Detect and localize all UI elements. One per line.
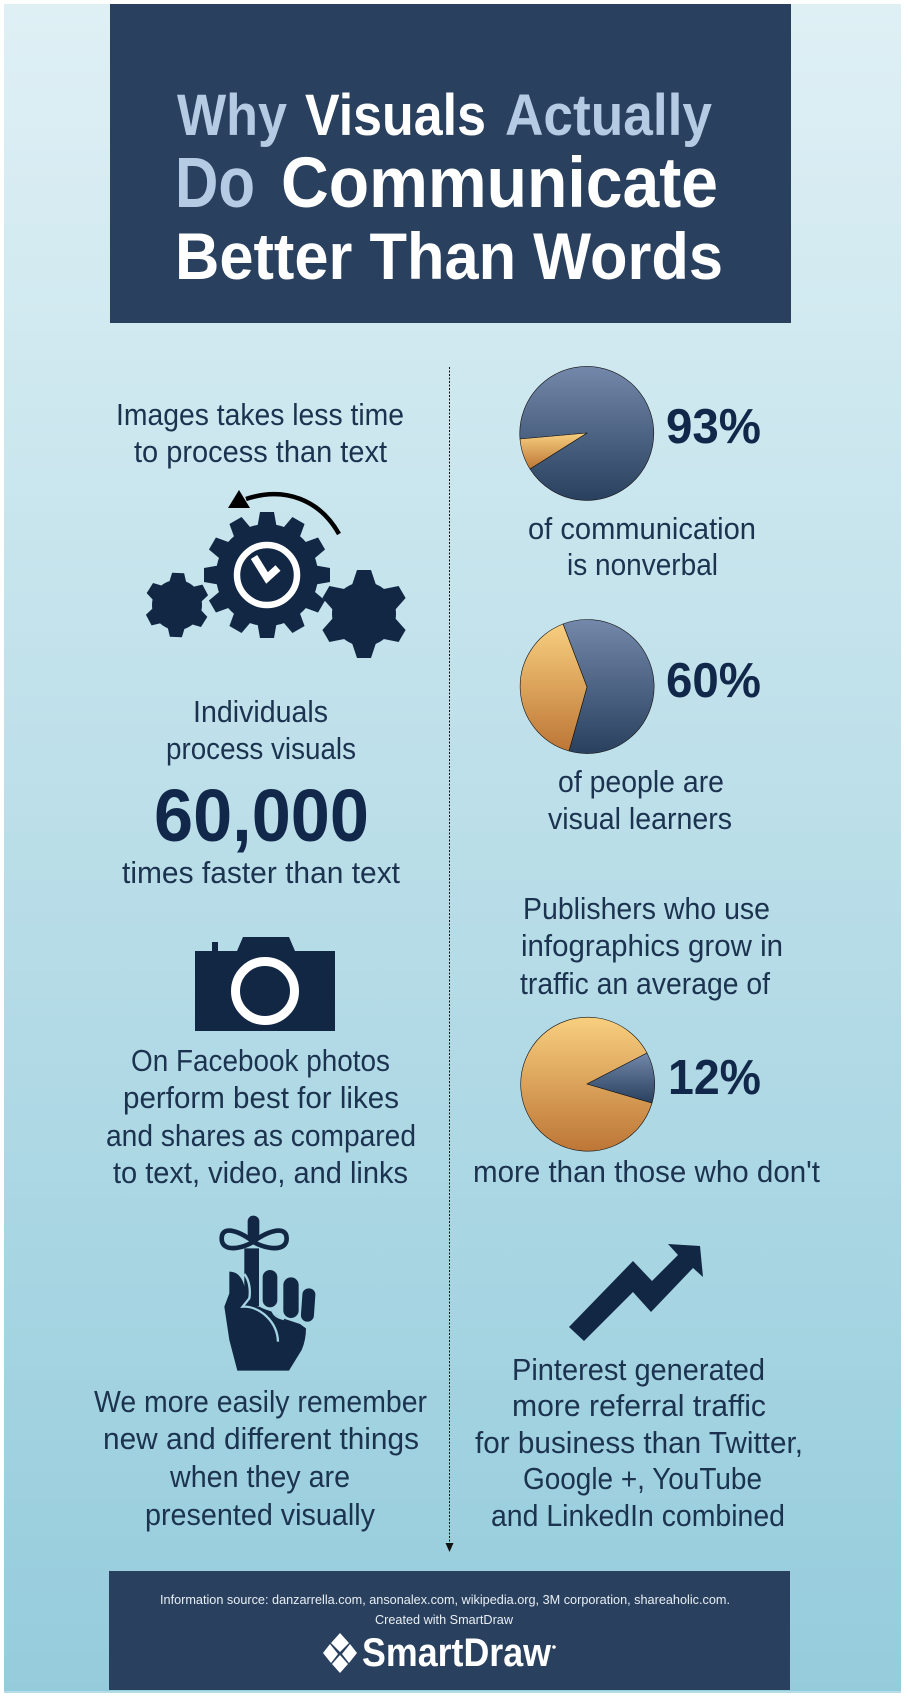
medium gear xyxy=(320,570,408,658)
text: pinterest: and LinkedIn combined xyxy=(491,1498,785,1533)
source text: Information source: danzarrella.com, ansonalex.com, wikipedia.org, 3M corporation, shareaholic.com. xyxy=(160,1592,730,1607)
stat: 60%: 60% xyxy=(666,654,761,708)
text: facebook photos: On Facebook photos xyxy=(131,1043,390,1078)
text: more than those: more than those who don't xyxy=(473,1154,820,1189)
title xyxy=(175,83,723,293)
text: pinterest: Google +, YouTube xyxy=(523,1461,762,1496)
text: facebook photos xyxy=(106,1043,416,1190)
text: pinterest xyxy=(475,1352,803,1533)
text: pinterest: Pinterest generated xyxy=(512,1352,765,1387)
pie chart: 60% xyxy=(520,620,654,754)
stat: 93%: 93% xyxy=(666,400,761,454)
large gear xyxy=(204,512,330,638)
text: 60,000 times faster xyxy=(122,694,400,890)
text: remember: new and different things xyxy=(103,1421,419,1456)
small gear xyxy=(145,573,209,637)
big number: 60,000 xyxy=(154,774,369,857)
text: 60,000 times faster: Individuals xyxy=(193,694,328,729)
title: Communicate xyxy=(281,144,718,223)
title: Better Than Words xyxy=(175,219,723,293)
text: pinterest: for business than Twitter, xyxy=(475,1425,803,1460)
text: images take less time xyxy=(116,397,404,469)
title: Do xyxy=(175,144,255,223)
text: publishers: traffic an average of xyxy=(520,966,770,1001)
text: visual learners: visual learners xyxy=(548,801,732,836)
text: nonverbal: is nonverbal xyxy=(567,547,718,582)
footer panel xyxy=(109,1571,790,1690)
source text xyxy=(160,1592,730,1627)
text: visual learners xyxy=(548,764,732,836)
text: facebook photos: and shares as compared xyxy=(106,1118,416,1153)
text: remember: presented visually xyxy=(145,1497,375,1532)
icon: finger with ribbon xyxy=(222,1216,316,1371)
pie chart: 93% xyxy=(520,366,654,500)
pie chart: 12% xyxy=(521,1017,655,1151)
source text: Created with SmartDraw xyxy=(375,1612,514,1627)
dotted divider arrow xyxy=(446,367,454,1552)
icon: gears with clock xyxy=(145,490,408,658)
logo: SmartDraw: SmartDraw xyxy=(362,1631,552,1675)
title: Actually xyxy=(505,83,712,148)
text: remember: We more easily remember xyxy=(94,1384,427,1419)
text: 60,000 times faster: process visuals xyxy=(166,731,356,766)
text: images take less time: Images takes less time xyxy=(116,397,404,432)
icon: camera xyxy=(195,937,335,1031)
text: nonverbal: of communication xyxy=(528,511,756,546)
text: publishers xyxy=(520,891,783,1001)
text: remember xyxy=(94,1384,427,1532)
text: visual learners: of people are xyxy=(558,764,724,799)
text: facebook photos: to text, video, and links xyxy=(113,1155,408,1190)
text: facebook photos: perform best for likes xyxy=(123,1080,399,1115)
stat: 12%: 12% xyxy=(668,1051,761,1105)
text: publishers: Publishers who use xyxy=(523,891,770,926)
text: images take less time: to process than text xyxy=(134,434,387,469)
text: nonverbal xyxy=(528,511,756,582)
text: 60,000 times faster: times faster than text xyxy=(122,855,400,890)
title: Visuals xyxy=(305,83,486,148)
icon: rising arrow xyxy=(569,1244,703,1341)
text: pinterest: more referral traffic xyxy=(512,1388,766,1423)
header panel xyxy=(110,4,791,323)
title: Why xyxy=(177,83,287,148)
text: publishers: infographics grow in xyxy=(521,928,783,963)
text: remember: when they are xyxy=(169,1459,350,1494)
rotation arrow xyxy=(228,490,339,534)
